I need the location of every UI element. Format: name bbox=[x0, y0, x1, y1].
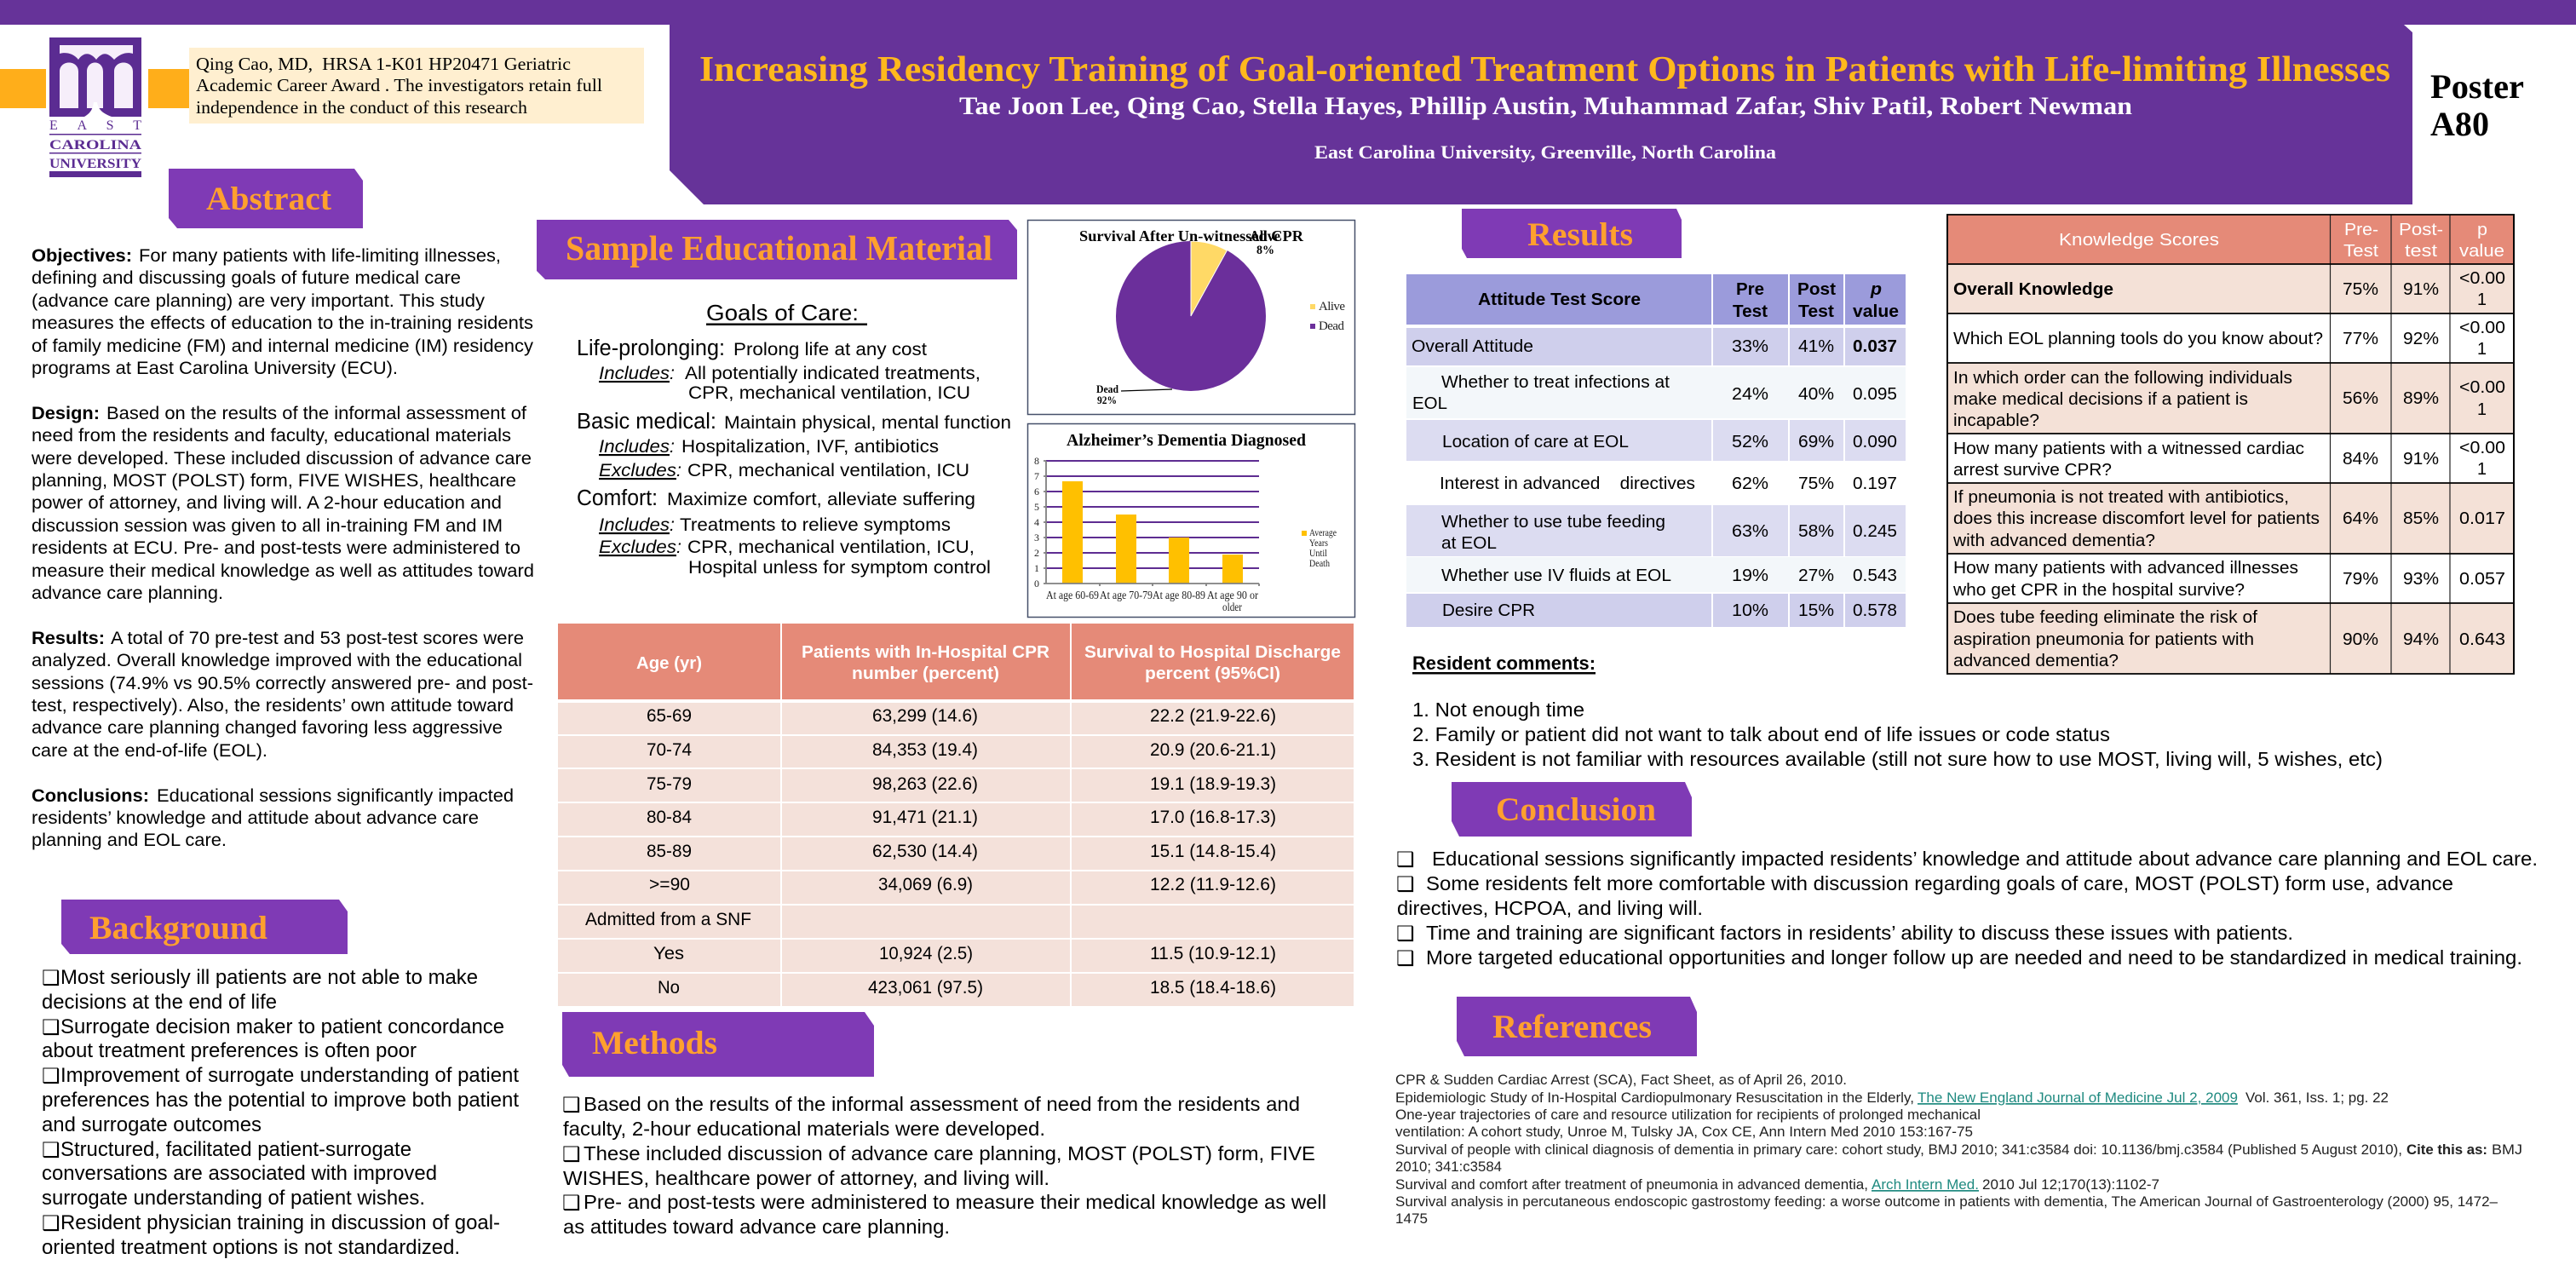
table: knowledge scores: does this increase discomfort level for patients bbox=[1953, 509, 2320, 528]
conclusion list: ❑ bbox=[1396, 848, 1415, 871]
table: knowledge scores: 64% bbox=[2343, 509, 2378, 528]
table: knowledge scores: Knowledge Scores bbox=[2059, 230, 2219, 250]
table: in-hospital CPR by age: Survival to Hospital Discharge bbox=[1084, 642, 1341, 662]
references list: 2010; 341:c3584 bbox=[1395, 1159, 1502, 1175]
table: attitude test score: Pre bbox=[1736, 279, 1764, 299]
heading: References bbox=[1457, 997, 1697, 1056]
abstract text bbox=[31, 246, 534, 850]
poster number bbox=[2430, 67, 2524, 143]
table: knowledge scores: 0.643 bbox=[2459, 630, 2505, 649]
table: knowledge scores: Post- bbox=[2399, 220, 2443, 239]
table: attitude test score: 75% bbox=[1798, 474, 1834, 493]
methods list: as attitudes toward advance care planning. bbox=[563, 1216, 950, 1238]
table: knowledge scores: incapable? bbox=[1953, 411, 2039, 430]
table: in-hospital CPR by age: 75-79 bbox=[647, 774, 692, 794]
panel: goals of care: : bbox=[676, 537, 681, 557]
table: attitude test score: 41% bbox=[1798, 336, 1834, 356]
poster number: Poster bbox=[2430, 67, 2524, 106]
background list: Most seriously ill patients are not able to make bbox=[60, 966, 478, 989]
conclusion list: ❑ bbox=[1396, 872, 1415, 896]
methods list bbox=[562, 1093, 1326, 1238]
conclusion list: Some residents felt more comfortable with discussion regarding goals of care, MOST (POLST) form use, advance bbox=[1426, 872, 2453, 894]
table: attitude test score: Overall Attitude bbox=[1412, 336, 1533, 356]
pie chart: survival after un-witnessed CPR: 92% bbox=[1097, 394, 1117, 406]
background list: ❑ bbox=[42, 966, 60, 990]
heading: Background bbox=[61, 900, 348, 954]
panel: goals of care: Includes bbox=[599, 363, 670, 383]
background list: decisions at the end of life bbox=[42, 991, 277, 1014]
funding note bbox=[189, 48, 644, 124]
abstract text: residents’ knowledge and attitude about advance care bbox=[32, 808, 479, 828]
table: knowledge scores: 84% bbox=[2343, 449, 2378, 469]
background list: ❑ bbox=[42, 1064, 60, 1088]
panel: goals of care: Excludes bbox=[599, 537, 676, 557]
table: knowledge scores: p bbox=[2477, 220, 2487, 239]
abstract text: defining and discussing goals of future medical care bbox=[32, 268, 461, 288]
abstract text: Results: bbox=[32, 629, 105, 648]
panel: goals of care: Basic medical: bbox=[577, 410, 716, 434]
abstract text: sessions (74.9% vs 90.5% correctly answered pre- and post- bbox=[32, 674, 533, 693]
table: knowledge scores: <0.00 bbox=[2459, 377, 2505, 397]
table: attitude test score: 10% bbox=[1732, 601, 1768, 620]
table: knowledge scores: 0.057 bbox=[2459, 569, 2505, 589]
heading: Conclusion bbox=[1452, 782, 1692, 837]
table: attitude test score: Whether to treat infections at bbox=[1441, 372, 1670, 392]
table: attitude test score: 19% bbox=[1732, 566, 1768, 585]
abstract text: (advance care planning) are very important. This study bbox=[32, 291, 486, 311]
abstract text: Design: bbox=[32, 404, 100, 423]
table: in-hospital CPR by age: No bbox=[658, 978, 680, 998]
background list: Structured, facilitated patient-surrogate bbox=[60, 1138, 411, 1161]
table: in-hospital CPR by age: 84,353 (19.4) bbox=[872, 740, 978, 760]
panel: goals of care: Treatments to relieve symptoms bbox=[680, 515, 951, 535]
references list: Survival analysis in percutaneous endoscopic gastrostomy feeding: a worse outcome in patients with dementia, The American Journal of Gastroenterology (2000) 95, 1472– bbox=[1395, 1193, 2498, 1210]
pie chart: survival after un-witnessed CPR: Survival After Un-witnessed CPR bbox=[1079, 227, 1304, 244]
funding note: independence in the conduct of this research bbox=[196, 97, 528, 118]
references list bbox=[1395, 1072, 2522, 1227]
background list: ❑ bbox=[42, 1138, 60, 1162]
abstract text: A total of 70 pre-test and 53 post-test scores were bbox=[111, 629, 524, 648]
table: knowledge scores: 56% bbox=[2343, 388, 2378, 408]
abstract text: power of attorney, and living will. A 2-hour education and bbox=[32, 493, 502, 513]
table: in-hospital CPR by age: 18.5 (18.4-18.6) bbox=[1150, 978, 1276, 998]
panel: goals of care: Excludes bbox=[599, 460, 676, 480]
methods list: faculty, 2-hour educational materials were developed. bbox=[563, 1118, 1045, 1140]
panel: goals of care: Hospital unless for symptom control bbox=[688, 557, 991, 578]
table: knowledge scores: Overall Knowledge bbox=[1953, 279, 2113, 299]
table: knowledge scores: How many patients with advanced illnesses bbox=[1953, 558, 2298, 578]
table: in-hospital CPR by age: Age (yr) bbox=[636, 653, 702, 673]
table: attitude test score: 63% bbox=[1732, 521, 1768, 541]
heading: Methods bbox=[562, 1012, 874, 1077]
bar chart: Alzheimer's dementia diagnosed: At age 60-69 bbox=[1046, 589, 1099, 601]
abstract text: analyzed. Overall knowledge improved with the educational bbox=[32, 651, 522, 670]
heading: Abstract: Abstract bbox=[206, 181, 331, 217]
bar chart: Alzheimer's dementia diagnosed: 5 bbox=[1034, 501, 1039, 513]
table: knowledge scores: <0.00 bbox=[2459, 438, 2505, 457]
authors: Tae Joon Lee, Qing Cao, Stella Hayes, Phillip Austin, Muhammad Zafar, Shiv Patil, Robert Newman bbox=[959, 92, 2132, 120]
abstract text: planning, MOST (POLST) form, FIVE WISHES, healthcare bbox=[32, 471, 516, 491]
panel: goals of care: Maintain physical, mental function bbox=[724, 412, 1011, 433]
pie chart: survival after un-witnessed CPR bbox=[1027, 220, 1354, 414]
panel: goals of care bbox=[577, 300, 1011, 578]
abstract text: care at the end-of-life (EOL). bbox=[32, 741, 267, 761]
heading: Sample Educational Material: Sample Educational Material bbox=[566, 228, 992, 267]
table: knowledge scores: Pre- bbox=[2344, 220, 2378, 239]
bar chart: Alzheimer's dementia diagnosed: Years bbox=[1309, 538, 1328, 549]
heading: Sample Educational Material bbox=[537, 220, 1017, 279]
table: knowledge scores: test bbox=[2405, 241, 2437, 261]
abstract text: Based on the results of the informal assessment of bbox=[106, 404, 526, 423]
table: knowledge scores: Does tube feeding eliminate the risk of bbox=[1953, 607, 2257, 627]
table: in-hospital CPR by age: Yes bbox=[653, 944, 684, 963]
table: in-hospital CPR by age: Admitted from a SNF bbox=[585, 910, 751, 929]
methods list: ❑ bbox=[562, 1093, 581, 1117]
panel: goals of care: : bbox=[676, 460, 681, 480]
methods list: Based on the results of the informal assessment of need from the residents and bbox=[584, 1093, 1300, 1115]
panel: goals of care: All potentially indicated treatments, bbox=[685, 363, 980, 383]
table: attitude test score: Attitude Test Score bbox=[1478, 290, 1641, 309]
abstract text: discussion session was given to all in-training FM and IM bbox=[32, 516, 503, 536]
abstract text: measures the effects of education to the in-training residents bbox=[32, 313, 533, 333]
background list: ❑ bbox=[42, 1211, 60, 1235]
table: in-hospital CPR by age: 63,299 (14.6) bbox=[872, 706, 978, 726]
references list: CPR & Sudden Cardiac Arrest (SCA), Fact Sheet, as of April 26, 2010. bbox=[1395, 1072, 1847, 1088]
bar chart: Alzheimer's dementia diagnosed: 7 bbox=[1034, 470, 1039, 482]
abstract text: programs at East Carolina University (ECU). bbox=[32, 359, 398, 378]
references list: ventilation: A cohort study, Unroe M, Tulsky JA, Cox CE, Ann Intern Med 2010 153:167-75 bbox=[1395, 1124, 1973, 1140]
table: knowledge scores: arrest survive CPR? bbox=[1953, 460, 2112, 480]
table: attitude test score: Whether use IV fluids at EOL bbox=[1441, 566, 1671, 585]
background list: surrogate understanding of patient wishes. bbox=[42, 1187, 425, 1210]
background list: Surrogate decision maker to patient concordance bbox=[60, 1015, 504, 1038]
table: knowledge scores: 85% bbox=[2403, 509, 2439, 528]
table: knowledge scores: Test bbox=[2343, 241, 2378, 261]
table: attitude test score: 40% bbox=[1798, 384, 1834, 404]
table: knowledge scores: 1 bbox=[2477, 400, 2487, 419]
icon: East Carolina University logo bbox=[49, 37, 142, 177]
table: in-hospital CPR by age: 17.0 (16.8-17.3) bbox=[1150, 808, 1276, 827]
bar chart: Alzheimer's dementia diagnosed: 0 bbox=[1034, 578, 1039, 589]
table: knowledge scores: How many patients with a witnessed cardiac bbox=[1953, 439, 2304, 458]
table: in-hospital CPR by age: 22.2 (21.9-22.6) bbox=[1150, 706, 1276, 726]
table: attitude test score: at EOL bbox=[1441, 533, 1497, 553]
panel: goals of care: Maximize comfort, alleviate suffering bbox=[667, 489, 975, 509]
panel: goals of care: Hospitalization, IVF, antibiotics bbox=[681, 436, 939, 457]
table: in-hospital CPR by age: 65-69 bbox=[647, 706, 692, 726]
resident comments: Resident comments: bbox=[1412, 653, 1596, 674]
icon: East Carolina University logo: EAST bbox=[49, 118, 141, 133]
conclusion list: Educational sessions significantly impacted residents’ knowledge and attitude about advance care planning and EOL care. bbox=[1432, 848, 2538, 870]
funding note: Academic Career Award . The investigators retain full bbox=[196, 75, 602, 95]
panel: goals of care: CPR, mechanical ventilation, ICU bbox=[687, 460, 969, 480]
heading: Results: Results bbox=[1527, 216, 1633, 253]
bar chart: Alzheimer's dementia diagnosed: At age 80-89 bbox=[1153, 589, 1205, 601]
table: in-hospital CPR by age: 70-74 bbox=[647, 740, 692, 760]
background list: Improvement of surrogate understanding of patient bbox=[60, 1064, 519, 1087]
table: knowledge scores: who get CPR in the hospital survive? bbox=[1952, 580, 2245, 600]
pie chart: survival after un-witnessed CPR: Dead bbox=[1096, 382, 1119, 395]
table: attitude test score: 69% bbox=[1798, 432, 1834, 451]
table: knowledge scores: 90% bbox=[2343, 630, 2378, 649]
table: attitude test score: 0.090 bbox=[1853, 432, 1897, 451]
references list: BMJ bbox=[2492, 1141, 2522, 1158]
background list: preferences has the potential to improve both patient bbox=[42, 1089, 519, 1112]
table: knowledge scores: value bbox=[2459, 241, 2504, 261]
table: in-hospital CPR by age: 15.1 (14.8-15.4) bbox=[1150, 842, 1276, 861]
table: attitude test score: Test bbox=[1733, 302, 1768, 321]
table: knowledge scores: 89% bbox=[2403, 388, 2439, 408]
table: knowledge scores: 1 bbox=[2477, 339, 2487, 359]
table: attitude test score: 0.543 bbox=[1853, 566, 1897, 585]
table: attitude test score: 0.037 bbox=[1853, 336, 1897, 356]
table: in-hospital CPR by age: number (percent) bbox=[852, 664, 999, 683]
table: knowledge scores: 75% bbox=[2343, 279, 2378, 299]
methods list: WISHES, healthcare power of attorney, and living will. bbox=[563, 1167, 1049, 1189]
table: knowledge scores: In which order can the following individuals bbox=[1953, 368, 2292, 388]
abstract text: Educational sessions significantly impacted bbox=[157, 786, 514, 806]
conclusion list: Time and training are significant factors in residents’ ability to discuss these issues with patients. bbox=[1426, 922, 2293, 944]
poster number: A80 bbox=[2430, 105, 2489, 143]
pie chart: survival after un-witnessed CPR: 8% bbox=[1256, 244, 1274, 257]
icon: East Carolina University logo: CAROLINA bbox=[49, 138, 142, 152]
abstract text: advance care planning changed favoring less aggressive bbox=[32, 718, 503, 738]
table: in-hospital CPR by age: percent (95%CI) bbox=[1145, 664, 1280, 683]
background list: conversations are associated with improved bbox=[42, 1162, 437, 1185]
table: attitude test score: 15% bbox=[1798, 601, 1834, 620]
table: attitude test score: 0.095 bbox=[1853, 384, 1897, 404]
bar chart: Alzheimer's dementia diagnosed: Average bbox=[1309, 528, 1337, 538]
table: knowledge scores: 91% bbox=[2403, 279, 2439, 299]
resident comments: 2. Family or patient did not want to talk about end of life issues or code status bbox=[1412, 723, 2110, 745]
table: attitude test score: 0.578 bbox=[1853, 601, 1897, 620]
bar chart: Alzheimer's dementia diagnosed: older bbox=[1222, 601, 1242, 613]
references list: 2010 Jul 12;170(13):1102-7 bbox=[1982, 1176, 2159, 1193]
table: knowledge scores: 1 bbox=[2477, 290, 2487, 309]
table: attitude test score: value bbox=[1853, 302, 1899, 321]
table: attitude test score: 62% bbox=[1732, 474, 1768, 493]
heading: Abstract bbox=[169, 169, 363, 228]
table: in-hospital CPR by age: 62,530 (14.4) bbox=[872, 842, 978, 861]
methods list: Pre- and post-tests were administered to measure their medical knowledge as well bbox=[584, 1191, 1326, 1213]
header banner bbox=[0, 0, 2576, 204]
bar chart: Alzheimer's dementia diagnosed: 4 bbox=[1034, 516, 1039, 528]
table: in-hospital CPR by age: 19.1 (18.9-19.3) bbox=[1150, 774, 1276, 794]
background list: ❑ bbox=[42, 1015, 60, 1039]
funding note: Qing Cao, MD, HRSA 1-K01 HP20471 Geriatric bbox=[196, 54, 571, 74]
table: knowledge scores: advanced dementia? bbox=[1953, 651, 2119, 670]
panel: goals of care: Prolong life at any cost bbox=[733, 339, 927, 359]
table: in-hospital CPR by age bbox=[558, 624, 1354, 1006]
table: knowledge scores bbox=[1946, 215, 2515, 674]
table: knowledge scores: make medical decisions if a patient is bbox=[1953, 389, 2248, 409]
table: attitude test score: EOL bbox=[1412, 394, 1447, 413]
panel: goals of care: Life-prolonging: bbox=[577, 336, 725, 360]
bar chart: Alzheimer's dementia diagnosed: 6 bbox=[1034, 486, 1039, 497]
background list: oriented treatment options is not standardized. bbox=[42, 1236, 460, 1259]
pie chart: survival after un-witnessed CPR: Alive bbox=[1319, 300, 1345, 313]
methods list: These included discussion of advance care planning, MOST (POLST) form, FIVE bbox=[584, 1142, 1315, 1164]
references list: Cite this as: bbox=[2406, 1141, 2487, 1158]
table: knowledge scores: with advanced dementia? bbox=[1952, 531, 2155, 550]
table: attitude test score: Location of care at EOL bbox=[1442, 432, 1629, 451]
table: attitude test score: p bbox=[1870, 279, 1882, 299]
panel: goals of care: : bbox=[670, 363, 675, 383]
table: in-hospital CPR by age: 34,069 (6.9) bbox=[878, 875, 973, 894]
abstract text: Conclusions: bbox=[32, 786, 149, 806]
references list: The New England Journal of Medicine Jul 2, 2009 bbox=[1918, 1090, 2238, 1106]
background list: and surrogate outcomes bbox=[42, 1113, 262, 1136]
table: in-hospital CPR by age: 91,471 (21.1) bbox=[872, 808, 978, 827]
table: knowledge scores: 1 bbox=[2477, 459, 2487, 479]
heading: Conclusion: Conclusion bbox=[1496, 791, 1656, 828]
heading: References: References bbox=[1492, 1009, 1652, 1045]
bar chart: Alzheimer's dementia diagnosed bbox=[1027, 424, 1354, 617]
table: attitude test score: 24% bbox=[1732, 384, 1768, 404]
table: knowledge scores: 91% bbox=[2403, 449, 2439, 469]
panel: goals of care: Goals of Care: bbox=[706, 300, 859, 325]
bar chart: Alzheimer's dementia diagnosed: Death bbox=[1309, 559, 1330, 569]
abstract text: planning and EOL care. bbox=[32, 831, 227, 850]
bar chart: Alzheimer's dementia diagnosed: At age 70-79 bbox=[1100, 589, 1153, 601]
table: in-hospital CPR by age: 85-89 bbox=[647, 842, 692, 861]
references list: Vol. 361, Iss. 1; pg. 22 bbox=[2245, 1090, 2389, 1106]
resident comments: 3. Resident is not familiar with resources available (still not sure how to use MOST, living will, 5 wishes, etc) bbox=[1412, 748, 2383, 770]
resident comments: 1. Not enough time bbox=[1412, 699, 1584, 721]
references list: Epidemiologic Study of In-Hospital Cardiopulmonary Resuscitation in the Elderly, bbox=[1395, 1090, 1914, 1106]
table: attitude test score: 0.245 bbox=[1853, 521, 1897, 541]
table: in-hospital CPR by age: 10,924 (2.5) bbox=[879, 944, 973, 963]
panel: goals of care: CPR, mechanical ventilation, ICU bbox=[688, 382, 970, 403]
panel: goals of care: Includes bbox=[599, 436, 670, 457]
table: attitude test score: 58% bbox=[1798, 521, 1834, 541]
table: knowledge scores: 77% bbox=[2343, 329, 2378, 348]
background list: Resident physician training in discussion of goal- bbox=[60, 1211, 500, 1234]
abstract text: need from the residents and faculty, educational materials bbox=[32, 426, 511, 446]
pie chart: survival after un-witnessed CPR: Alive bbox=[1250, 227, 1280, 244]
panel: goals of care: : bbox=[670, 436, 675, 457]
background list bbox=[42, 966, 519, 1259]
table: knowledge scores: <0.00 bbox=[2459, 268, 2505, 288]
table: knowledge scores: <0.00 bbox=[2459, 318, 2505, 337]
bar chart: Alzheimer's dementia diagnosed: Until bbox=[1309, 549, 1327, 559]
table: in-hospital CPR by age: 11.5 (10.9-12.1) bbox=[1150, 944, 1276, 963]
affiliation: East Carolina University, Greenville, North Carolina bbox=[1314, 141, 1776, 163]
references list: One-year trajectories of care and resource utilization for recipients of prolonged mechanical bbox=[1395, 1107, 1981, 1123]
bar chart: Alzheimer's dementia diagnosed: Alzheimer’s Dementia Diagnosed bbox=[1067, 431, 1306, 450]
methods list: ❑ bbox=[562, 1142, 581, 1166]
table: knowledge scores: 0.017 bbox=[2459, 509, 2505, 528]
abstract text: residents at ECU. Pre- and post-tests were administered to bbox=[32, 538, 520, 558]
abstract text: of family medicine (FM) and internal medicine (IM) residency bbox=[32, 336, 534, 356]
table: attitude test score: Post bbox=[1797, 279, 1836, 299]
conclusion list: ❑ bbox=[1396, 946, 1415, 970]
conclusion list bbox=[1396, 848, 2538, 970]
heading: Methods: Methods bbox=[592, 1025, 717, 1061]
table: in-hospital CPR by age: >=90 bbox=[649, 875, 690, 894]
table: attitude test score: Whether to use tube feeding bbox=[1441, 512, 1665, 532]
resident comments bbox=[1412, 653, 2383, 770]
orange logo stripes bbox=[0, 69, 189, 108]
table: knowledge scores: 92% bbox=[2403, 329, 2439, 348]
bar chart: Alzheimer's dementia diagnosed: 2 bbox=[1034, 547, 1039, 559]
table: in-hospital CPR by age: 423,061 (97.5) bbox=[868, 978, 983, 998]
table: attitude test score bbox=[1406, 274, 1906, 627]
conclusion list: directives, HCPOA, and living will. bbox=[1397, 897, 1703, 919]
table: attitude test score: 33% bbox=[1732, 336, 1768, 356]
heading: Results bbox=[1462, 209, 1682, 258]
table: attitude test score: Interest in advanced directives bbox=[1440, 474, 1695, 493]
table: attitude test score: 52% bbox=[1732, 432, 1768, 451]
panel: goals of care: Comfort: bbox=[577, 486, 658, 510]
table: attitude test score: Desire CPR bbox=[1442, 601, 1535, 620]
panel: goals of care: Includes bbox=[599, 515, 670, 535]
pie chart: survival after un-witnessed CPR: Dead bbox=[1319, 319, 1344, 333]
abstract text: Objectives: bbox=[32, 246, 132, 266]
table: in-hospital CPR by age: 12.2 (11.9-12.6) bbox=[1150, 875, 1276, 894]
references list: Survival and comfort after treatment of pneumonia in advanced dementia, bbox=[1395, 1176, 1868, 1193]
table: knowledge scores: 93% bbox=[2403, 569, 2439, 589]
icon: East Carolina University logo: UNIVERSITY bbox=[49, 157, 141, 171]
bar chart: Alzheimer's dementia diagnosed: 3 bbox=[1034, 532, 1039, 543]
table: in-hospital CPR by age: 20.9 (20.6-21.1) bbox=[1150, 740, 1276, 760]
table: in-hospital CPR by age: 80-84 bbox=[647, 808, 692, 827]
table: knowledge scores: 94% bbox=[2403, 630, 2439, 649]
panel: goals of care: CPR, mechanical ventilation, ICU, bbox=[687, 537, 975, 557]
heading: Background: Background bbox=[89, 910, 267, 946]
table: knowledge scores: aspiration pneumonia for patients with bbox=[1953, 630, 2254, 649]
abstract text: measure their medical knowledge as well as attitudes toward bbox=[32, 561, 534, 581]
abstract text: For many patients with life-limiting illnesses, bbox=[139, 246, 501, 266]
methods list: ❑ bbox=[562, 1191, 581, 1215]
references list: Survival of people with clinical diagnosis of dementia in primary care: cohort study, BMJ 2010; 341:c3584 doi: 10.1136/bmj.c3584 (Published 5 August 2010), bbox=[1395, 1141, 2402, 1158]
bar chart: Alzheimer's dementia diagnosed: 8 bbox=[1034, 455, 1039, 467]
abstract text: test, respectively). Also, the residents’ own attitude toward bbox=[32, 696, 514, 716]
poster title: Increasing Residency Training of Goal-oriented Treatment Options in Patients with Life-limiting Illnesses bbox=[699, 50, 2390, 89]
table: in-hospital CPR by age: 98,263 (22.6) bbox=[872, 774, 978, 794]
table: in-hospital CPR by age: Patients with In-Hospital CPR bbox=[802, 642, 1049, 662]
table: knowledge scores: 79% bbox=[2343, 569, 2378, 589]
bar chart: Alzheimer's dementia diagnosed: At age 90 or bbox=[1207, 589, 1258, 601]
table: attitude test score: Test bbox=[1798, 302, 1834, 321]
bar chart: Alzheimer's dementia diagnosed: 1 bbox=[1034, 562, 1039, 574]
abstract text: advance care planning. bbox=[32, 584, 223, 603]
conclusion list: More targeted educational opportunities and longer follow up are needed and need to be standardized in medical training. bbox=[1426, 946, 2522, 969]
background list: about treatment preferences is often poor bbox=[42, 1039, 417, 1062]
table: attitude test score: 0.197 bbox=[1853, 474, 1897, 493]
table: knowledge scores: If pneumonia is not treated with antibiotics, bbox=[1953, 487, 2289, 507]
references list: Arch Intern Med. bbox=[1872, 1176, 1979, 1193]
panel: goals of care: : bbox=[670, 515, 675, 535]
abstract text: were developed. These included discussion of advance care bbox=[31, 449, 532, 469]
table: attitude test score: 27% bbox=[1798, 566, 1834, 585]
references list: 1475 bbox=[1395, 1210, 1428, 1227]
conclusion list: ❑ bbox=[1396, 922, 1415, 946]
table: knowledge scores: Which EOL planning tools do you know about? bbox=[1953, 329, 2323, 348]
